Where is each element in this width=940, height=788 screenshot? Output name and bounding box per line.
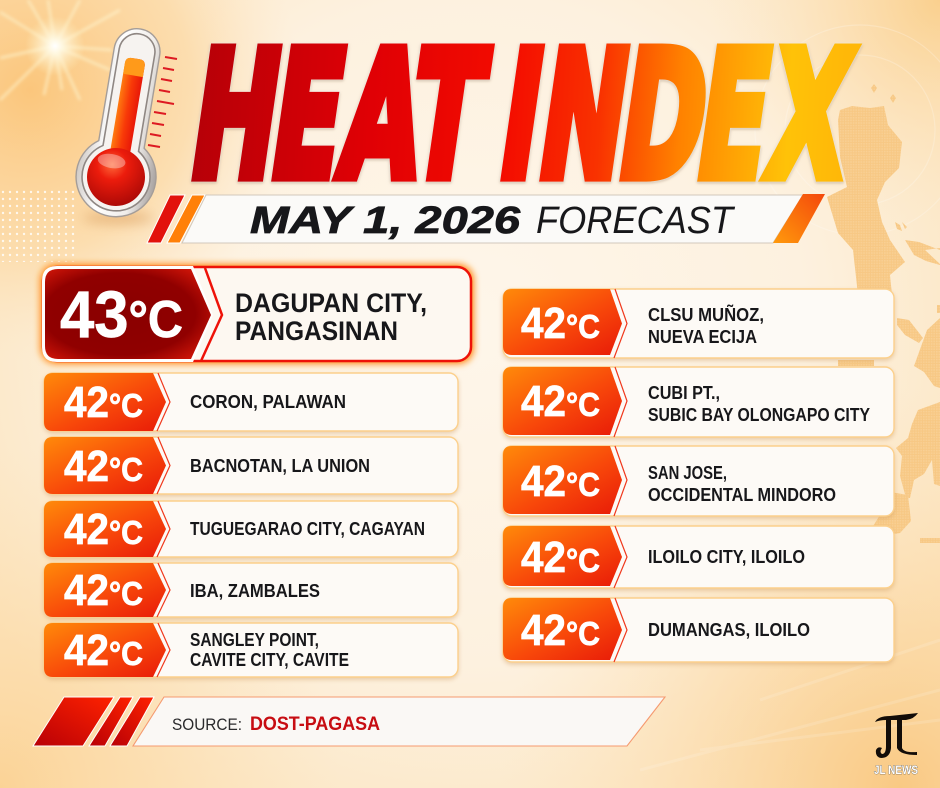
panel: right column rows bbox=[503, 289, 894, 662]
map of the Philippines bbox=[827, 84, 940, 543]
logo: JL News: JL NEWS bbox=[874, 763, 918, 777]
row: Cubi Pt. bbox=[503, 367, 894, 437]
row: Iba: IBA, ZAMBALES bbox=[190, 581, 320, 601]
panel: left column rows bbox=[44, 373, 458, 677]
logo: JL News bbox=[874, 713, 918, 777]
row: Iloilo City bbox=[503, 526, 894, 588]
row: Dumangas: DUMANGAS, ILOILO bbox=[648, 620, 810, 640]
source text bbox=[172, 714, 380, 735]
row: Dumangas bbox=[503, 598, 894, 662]
row: Cubi Pt.: CUBI PT., bbox=[648, 383, 720, 403]
date text bbox=[250, 200, 736, 242]
row: Sangley Point: SANGLEY POINT, bbox=[190, 630, 319, 650]
location: PANGASINAN bbox=[235, 316, 398, 346]
row: Sangley Point: CAVITE CITY, CAVITE bbox=[190, 650, 349, 670]
date text: MAY 1, 2026 bbox=[250, 200, 521, 242]
row: CLSU Muñoz: NUEVA ECIJA bbox=[648, 327, 757, 347]
row: Tuguegarao: 42°C bbox=[64, 505, 143, 554]
row: Tuguegarao: TUGUEGARAO CITY, CAGAYAN bbox=[190, 519, 425, 539]
row: San Jose: 42°C bbox=[521, 457, 600, 506]
row: Iba bbox=[44, 563, 458, 617]
date banner bbox=[147, 194, 825, 243]
row: Coron: 42°C bbox=[64, 378, 143, 427]
row: Tuguegarao bbox=[44, 501, 458, 557]
row: San Jose bbox=[503, 446, 894, 516]
row: Cubi Pt.: SUBIC BAY OLONGAPO CITY bbox=[648, 405, 870, 425]
row: CLSU Muñoz: 42°C bbox=[521, 299, 600, 348]
row: Iba: 42°C bbox=[64, 566, 143, 615]
row: Bacnotan: 42°C bbox=[64, 442, 143, 491]
row: Cubi Pt.: 42°C bbox=[521, 377, 600, 426]
thermometer bbox=[70, 22, 180, 224]
row: Bacnotan bbox=[44, 437, 458, 494]
row: Iloilo City: 42°C bbox=[521, 533, 600, 582]
date text: FORECAST bbox=[536, 200, 736, 242]
source banner bbox=[33, 697, 665, 746]
location: DAGUPAN CITY, bbox=[235, 288, 427, 318]
temperature: 43°C bbox=[60, 277, 183, 351]
row: Coron bbox=[44, 373, 458, 431]
row: Sangley Point bbox=[44, 623, 458, 677]
source text: DOST-PAGASA bbox=[250, 714, 380, 735]
row: Iloilo City: ILOILO CITY, ILOILO bbox=[648, 547, 805, 567]
row: CLSU Muñoz: CLSU MUÑOZ, bbox=[648, 304, 764, 325]
row: CLSU Muñoz bbox=[503, 289, 894, 358]
row: Dumangas: 42°C bbox=[521, 606, 600, 655]
row: Sangley Point: 42°C bbox=[64, 626, 143, 675]
row: San Jose: SAN JOSE, bbox=[648, 463, 727, 483]
row: Coron: CORON, PALAWAN bbox=[190, 392, 346, 412]
location bbox=[235, 288, 427, 346]
source text: SOURCE: bbox=[172, 715, 242, 734]
row: San Jose: OCCIDENTAL MINDORO bbox=[648, 485, 836, 505]
thermometer tick marks bbox=[148, 57, 177, 147]
title: HEAT INDEX bbox=[180, 14, 863, 217]
icon: sun bbox=[0, 0, 120, 100]
row: Bacnotan: BACNOTAN, LA UNION bbox=[190, 456, 370, 476]
panel: top reading 43°C bbox=[40, 264, 474, 364]
